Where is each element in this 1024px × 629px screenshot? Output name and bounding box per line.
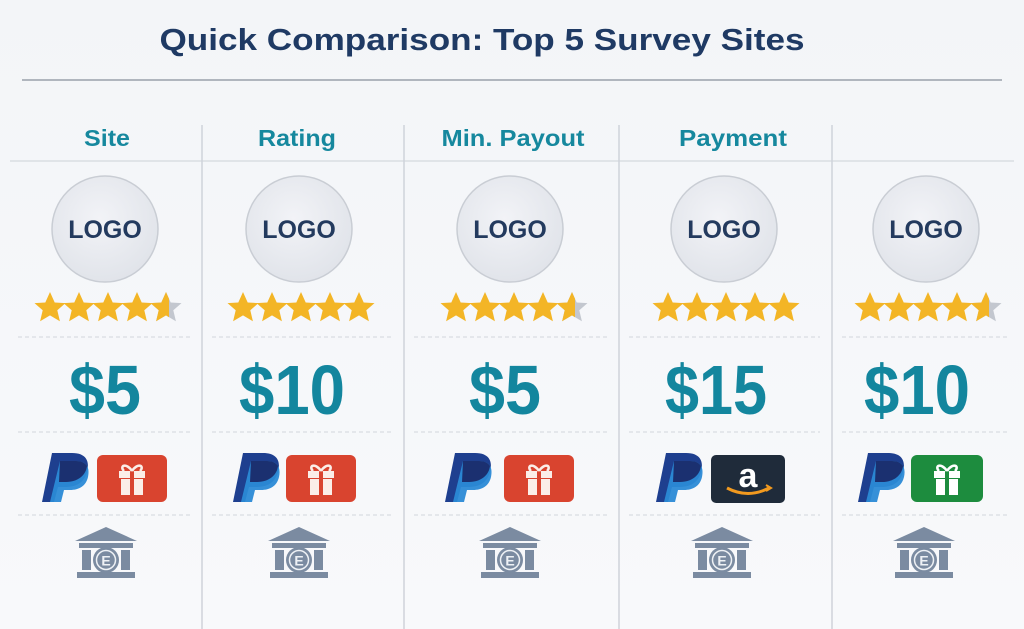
row: bank icons: [75, 527, 955, 578]
row: logos: LOGO: [473, 216, 547, 244]
column headers: Site: [84, 125, 130, 151]
row: minimum payouts: $5: [469, 351, 541, 429]
row: minimum payouts: $5: [69, 351, 141, 429]
row: payment methods: [42, 453, 983, 503]
row: minimum payouts: $15: [665, 351, 767, 429]
row: logos: LOGO: [68, 216, 142, 244]
icon: amazon card: a: [739, 457, 759, 495]
column headers: Payment: [679, 125, 787, 151]
row: logos: LOGO: [889, 216, 963, 244]
row: logos: LOGO: [262, 216, 336, 244]
table: [10, 125, 1014, 629]
column headers: Rating: [258, 125, 336, 151]
row: star ratings: [34, 292, 1002, 321]
row: logos: [52, 176, 979, 282]
column headers: [84, 125, 787, 151]
row: minimum payouts: $10: [864, 351, 970, 429]
title: Quick Comparison: Top 5 Survey Sites: [160, 22, 804, 57]
row: logos: LOGO: [687, 216, 761, 244]
icon: amazon card: [711, 455, 785, 503]
column headers: Min. Payout: [442, 125, 585, 151]
row: minimum payouts: $10: [239, 351, 345, 429]
row: minimum payouts: [69, 351, 970, 429]
